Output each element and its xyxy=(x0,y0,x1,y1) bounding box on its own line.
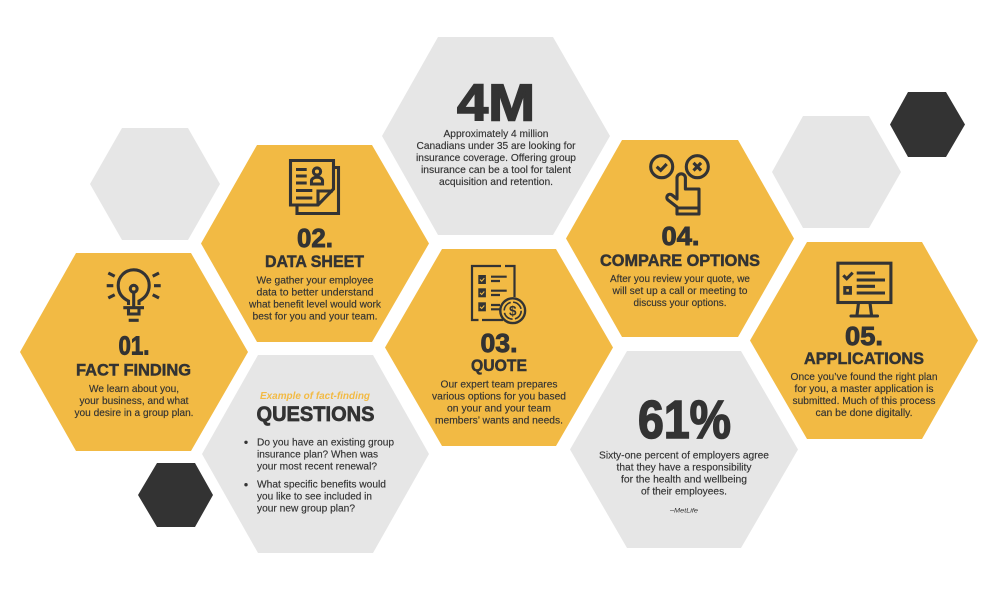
step heading: QUOTE xyxy=(471,356,527,375)
statistic description: insurance coverage. Offering group xyxy=(416,153,576,164)
step description: can be done digitally. xyxy=(816,408,912,419)
step description xyxy=(610,274,750,309)
step description xyxy=(790,372,938,419)
step description: discuss your options. xyxy=(634,298,726,309)
icon: check, cross and pointing hand xyxy=(651,156,708,214)
bullet one: Do you have an existing group xyxy=(257,437,394,448)
statistic description: for the health and wellbeing xyxy=(621,475,747,486)
icon: computer monitor with checklist xyxy=(838,263,891,316)
bullet one: insurance plan? When was xyxy=(257,449,378,460)
step description: on your and your team xyxy=(447,404,551,415)
statistic description: that they have a responsibility xyxy=(616,463,752,474)
step description: data to better understand xyxy=(256,288,374,299)
step description: Our expert team prepares xyxy=(440,380,558,391)
statistic description: Sixty-one percent of employers agree xyxy=(599,451,769,462)
step heading: FACT FINDING xyxy=(76,360,191,380)
bullet two: What specific benefits would xyxy=(257,480,386,491)
bullet two xyxy=(244,480,386,515)
statistic description: Canadians under 35 are looking for xyxy=(416,141,576,152)
step number: 03. xyxy=(480,328,518,358)
bullet two: you like to see included in xyxy=(257,492,372,503)
bullet one xyxy=(244,437,394,472)
statistic description xyxy=(416,129,576,188)
step description: Once you’ve found the right plan xyxy=(790,372,938,383)
panel: 03 quote xyxy=(385,249,613,446)
step description: various options for you based xyxy=(432,392,566,403)
step number: 02. xyxy=(297,223,333,253)
big number: 4M xyxy=(457,75,535,133)
step description: We learn about you, xyxy=(89,384,179,395)
step description xyxy=(432,380,566,427)
panel: 01 fact finding xyxy=(20,253,248,451)
icon: light bulb xyxy=(107,270,161,320)
bullet two: your new group plan? xyxy=(257,504,355,515)
step description: members’ wants and needs. xyxy=(435,416,563,427)
statistic description: acquisition and retention. xyxy=(439,177,553,188)
step description xyxy=(248,276,382,323)
decorative dark hexagon right xyxy=(890,92,965,157)
step description: your business, and what xyxy=(80,396,189,407)
statistic description: Approximately 4 million xyxy=(444,129,549,140)
panel: questions xyxy=(202,355,429,553)
icon: checklist with dollar coin xyxy=(472,266,525,323)
step description: what benefit level would work xyxy=(248,300,382,311)
heading: QUESTIONS xyxy=(256,402,374,426)
step description: best for you and your team. xyxy=(252,312,378,323)
panel: 4M statistic xyxy=(382,37,610,235)
decorative gray hexagon right xyxy=(772,116,901,228)
step number: 01. xyxy=(118,330,150,360)
source: –MetLife xyxy=(669,508,698,515)
step description xyxy=(74,384,194,419)
icon: data sheet document xyxy=(290,160,338,214)
step heading: APPLICATIONS xyxy=(804,349,924,368)
statistic description: of their employees. xyxy=(641,487,727,498)
step heading: COMPARE OPTIONS xyxy=(600,251,760,270)
step description: After you review your quote, we xyxy=(610,274,750,285)
statistic description: insurance can be a tool for talent xyxy=(421,165,571,176)
panel: 05 applications xyxy=(750,242,978,439)
step heading: DATA SHEET xyxy=(265,252,365,271)
step description: you desire in a group plan. xyxy=(74,408,194,419)
step description: submitted. Much of this process xyxy=(792,396,936,407)
statistic description xyxy=(599,451,769,498)
panel: 02 data sheet xyxy=(201,145,429,342)
step number: 05. xyxy=(845,321,883,351)
decorative gray hexagon left xyxy=(90,128,220,240)
panel: 04 compare options xyxy=(566,140,794,337)
panel: 61% statistic xyxy=(570,351,798,548)
step description: We gather your employee xyxy=(256,276,374,287)
step description: for you, a master application is xyxy=(794,384,934,395)
decorative dark hexagon left xyxy=(138,463,213,527)
icon: checklist with dollar coin: $ xyxy=(509,304,517,318)
bullet one: your most recent renewal? xyxy=(257,461,377,472)
subheading: Example of fact-finding xyxy=(260,390,371,402)
step number: 04. xyxy=(662,221,700,251)
step description: will set up a call or meeting to xyxy=(612,286,748,297)
big number: 61% xyxy=(638,390,731,450)
